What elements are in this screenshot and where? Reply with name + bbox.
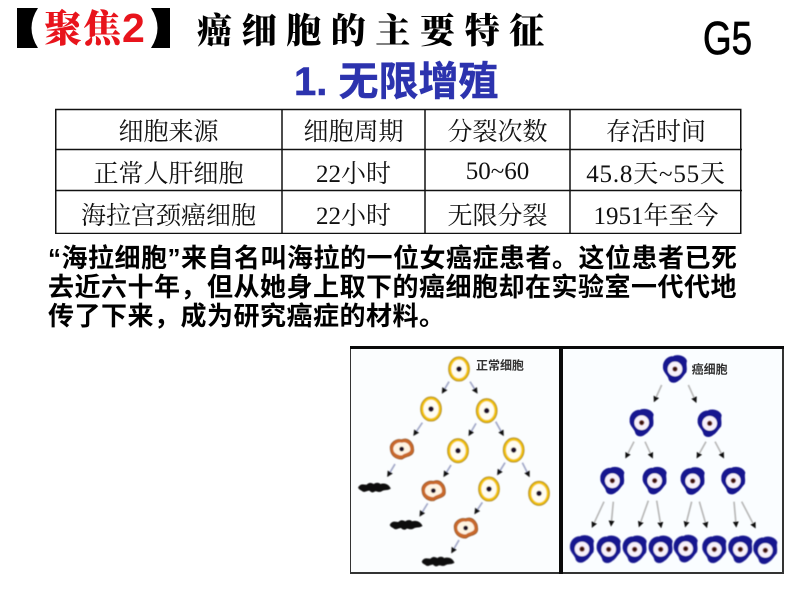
- header row: 细胞周期: [303, 119, 404, 146]
- row: normal liver cell: 正常人肝细胞: [93, 160, 244, 188]
- paragraph: HeLa cell story: “海拉细胞”来自名叫海拉的一位女癌症患者。这位患者已死: [48, 243, 738, 273]
- row: HeLa cell: 22小时: [316, 202, 391, 230]
- black left bracket: [17, 8, 38, 48]
- row: HeLa cell: 无限分裂: [447, 202, 548, 230]
- subheading: 1. 无限增殖: [294, 60, 498, 104]
- cancer cell lineage tree: [570, 355, 777, 564]
- division arrows: [593, 385, 754, 525]
- paragraph: HeLa cell story: 传了下来，成为研究癌症的材料。: [48, 301, 446, 331]
- row: normal liver cell: 22小时: [316, 160, 391, 188]
- row: normal liver cell: 45.8天~55天: [586, 160, 726, 188]
- header row: 存活时间: [606, 119, 706, 146]
- row: HeLa cell: 海拉宫颈癌细胞: [81, 202, 256, 230]
- header row: 分裂次数: [447, 119, 548, 146]
- paragraph: HeLa cell story: [48, 243, 738, 331]
- row: HeLa cell: [81, 202, 718, 230]
- row: normal liver cell: 50~60: [466, 158, 529, 184]
- normal cell lineage tree: [359, 357, 549, 566]
- header row: [118, 118, 706, 146]
- cancer cells: [570, 355, 777, 564]
- ageing cells: [390, 439, 478, 538]
- panel: normal cells: [350, 346, 784, 574]
- label: cancer cell: 癌细胞: [692, 362, 728, 377]
- header row: 细胞来源: [118, 119, 218, 146]
- healthy cells: [421, 357, 549, 505]
- data table: [55, 108, 742, 234]
- heading: focus tag: [17, 0, 170, 53]
- row: normal liver cell: [93, 158, 726, 188]
- grade label G5: G5: [703, 12, 752, 64]
- dead cells: [359, 483, 453, 566]
- label: normal cell: 正常细胞: [476, 357, 524, 372]
- division arrows: [389, 382, 528, 550]
- title: 癌细胞的主要特征: [197, 4, 554, 54]
- row: HeLa cell: 1951年至今: [593, 202, 718, 230]
- paragraph: HeLa cell story: 去近六十年，但从她身上取下的癌细胞却在实验室一代代地: [48, 272, 737, 302]
- black right bracket: [151, 8, 170, 48]
